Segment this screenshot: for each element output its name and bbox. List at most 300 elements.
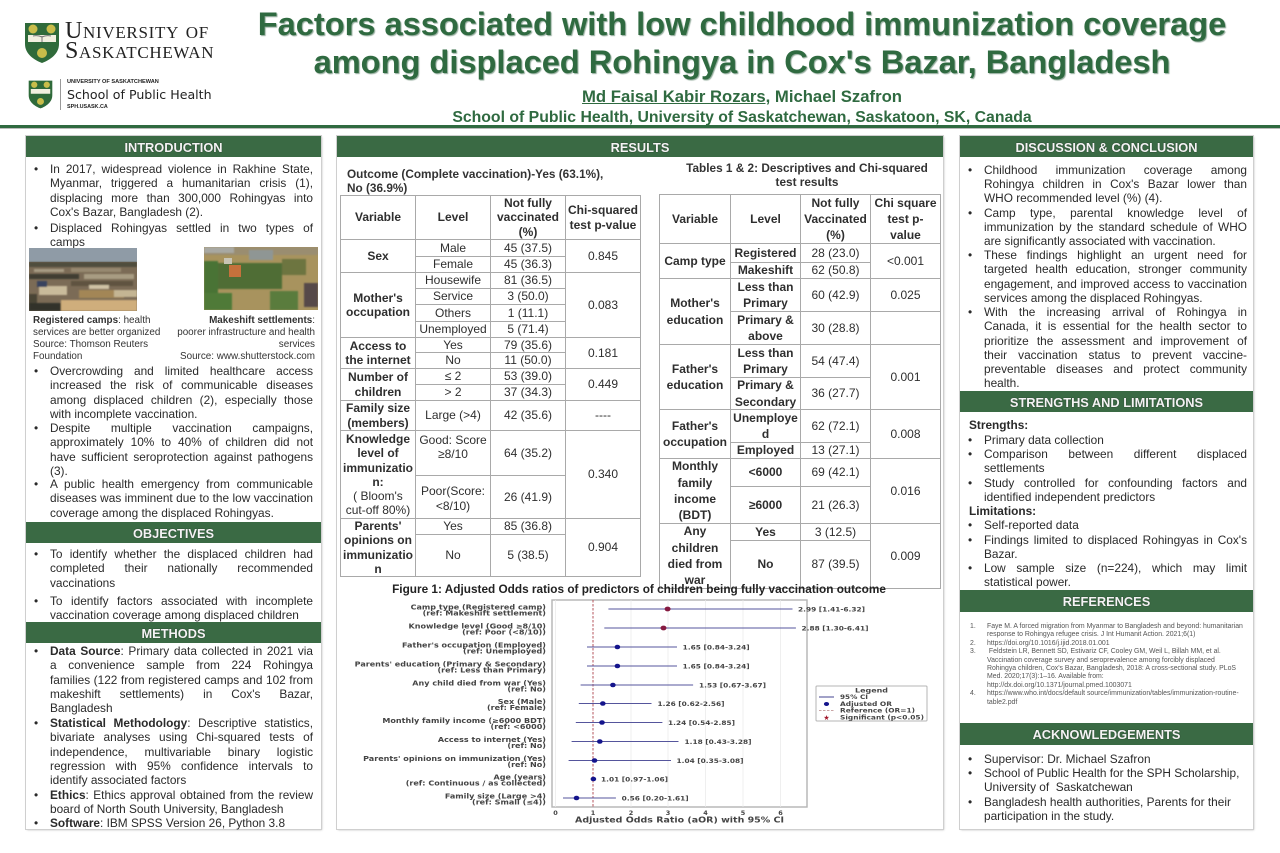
table 1: (%) [519, 225, 537, 239]
heading: results [337, 136, 943, 157]
panel: results [337, 136, 943, 829]
predictor labels: (ref: No) [507, 761, 546, 769]
table 1: 5 (38.5) [507, 548, 549, 562]
odds ratio value labels: 1.53 [0.67-3.67] [699, 682, 766, 690]
table 1: 3 (50.0) [507, 289, 549, 303]
table 1: Level [438, 210, 468, 224]
text: camp type bullet: immunization by the standard schedule of WHO [984, 220, 1247, 234]
text: reference list: Med. 2020;17(3):1–16. Available from: [987, 673, 1104, 680]
panel: right column: • [968, 162, 972, 176]
table 1: <8/10) [436, 498, 470, 512]
odds ratio value labels: 2.99 [1.41-6.32] [798, 606, 865, 614]
text: Canada bullet [968, 305, 1248, 390]
caption: registered camps: services are better organized [33, 327, 160, 338]
text: objective two: To identify factors associated with incomplete [50, 594, 313, 608]
text: overcrowding bullet [34, 364, 313, 421]
caption: registered camps [33, 315, 160, 362]
predictor labels: Father's occupation (Employed) [402, 641, 546, 649]
text: camps bullet: Displaced Rohingyas settled in two types of [50, 221, 313, 235]
text: ethics [34, 788, 314, 816]
heading: objectives [26, 522, 321, 543]
table 1: Yes [443, 338, 463, 352]
text: overcrowding bullet: with incomplete vaccination. [50, 407, 197, 421]
text: camp type bullet: are significantly associated with vaccination. [984, 234, 1216, 248]
table 1: 42 (35.6) [504, 408, 552, 422]
table 1: Chi-squared [568, 203, 638, 217]
table 2: family [678, 476, 712, 490]
table 2: Variable [672, 212, 718, 226]
panel: left column: • [34, 477, 38, 491]
table 1: 0.340 [588, 467, 618, 481]
text: emergency bullet: coverage among the displaced Rohingyas. [50, 506, 274, 520]
predictor labels: Age (years) [493, 773, 546, 781]
text: reference list: https://www.who.int/docs/default source/immunization/tables/immunization-routine- [987, 690, 1239, 697]
authors: Md Faisal Kabir Rozars, Michael Szafron [582, 87, 902, 106]
panel: right column: • [968, 752, 972, 766]
legend: Significant (p<0.05) [840, 714, 924, 721]
caption: makeshift settlements: poorer infrastructure and health [177, 327, 315, 338]
text: strength two: settlements [984, 461, 1045, 475]
table 2: Primary [743, 296, 788, 310]
figure title: Figure 1: Adjusted Odds ratios of predictors of children being fully vaccination outcome [392, 582, 886, 596]
table 1: 81 (36.5) [504, 273, 552, 287]
image: makeshift settlement photo [204, 247, 318, 310]
title: among displaced Rohingya in Cox's Bazar, Bangladesh [314, 43, 1170, 80]
text: Canada bullet: With the increasing arrival of Rohingya in [984, 305, 1247, 319]
table 1: 64 (35.2) [504, 446, 552, 460]
table 2: <0.001 [887, 254, 924, 268]
table 1: n: [372, 475, 384, 489]
table 2: 0.016 [890, 484, 921, 498]
predictor labels: (ref: No) [507, 685, 546, 693]
panel: right column: • [968, 305, 972, 319]
heading: references: REFERENCES [1063, 594, 1150, 609]
text: reference list: 1. [970, 623, 976, 630]
x axis ticks: 2 [629, 809, 633, 817]
predictor labels: (ref: Less than Primary) [437, 666, 546, 674]
table 2: 0.025 [890, 288, 921, 302]
predictor labels: (ref: Makeshift settlement) [423, 609, 546, 617]
text: objective one: vaccinations [50, 576, 115, 590]
table 2: Yes [755, 525, 776, 539]
panel: right column: • [968, 766, 972, 780]
panel: left column: • [34, 547, 38, 561]
text: data source: families (122 from registered camps and 102 from [50, 673, 313, 687]
panel: right column: • [968, 248, 972, 262]
title: Factors associated with low childhood immunization coverage [258, 5, 1226, 42]
table 1: Mother's [353, 291, 403, 305]
table 2: Level [750, 212, 781, 226]
table 1: Knowledge [346, 432, 410, 446]
affiliation: School of Public Health, University of Saskatchewan, Saskatoon, SK, Canada [452, 109, 1032, 126]
table 2: 0.009 [890, 549, 921, 563]
text: data source: Bangladesh [50, 701, 113, 715]
text: reference list: Faye M. A forced migration from Myanmar to Bangladesh and beyond: humanitarian [987, 623, 1243, 630]
table 1: Sex [367, 249, 389, 263]
table 1: Others [435, 306, 471, 320]
forest plot [355, 599, 928, 824]
predictor labels: Sex (Male) [498, 698, 546, 706]
panel: left column: • [34, 421, 38, 435]
text: authorities: participation in the study. [984, 809, 1114, 823]
panel: left column: • [34, 816, 38, 830]
odds ratio value labels: 1.01 [0.97-1.06] [601, 776, 668, 784]
caption: registered camps: Foundation [33, 351, 82, 362]
legend [816, 686, 927, 722]
heading: discussion and conclusion [960, 136, 1253, 157]
text: reference list: http://dx.doi.org/10.1371/journal.pmed.1003071 [987, 682, 1132, 689]
table 1: level of [357, 446, 399, 460]
heading: acknowledgements: ACKNOWLEDGEMENTS [1033, 727, 1180, 742]
legend: 95% CI [840, 694, 868, 701]
table 2: 0.008 [890, 427, 921, 441]
text: limitation two [968, 533, 1247, 561]
table 2: 0.001 [890, 370, 921, 384]
table 2: d [762, 427, 769, 441]
table 2: 13 (27.1) [811, 443, 860, 457]
text: statistical methodology: bivariate analyses using Chi-squared tests of [50, 730, 313, 744]
text: strength three: Study controlled for confounding factors and [984, 476, 1247, 490]
table 2: Secondary [735, 394, 796, 408]
text: objective two [34, 594, 313, 622]
table 2: Employed [737, 443, 794, 457]
text: findings bullet: targeted health education, stronger community [984, 262, 1247, 276]
text: objective two: vaccination coverage among displaced children [50, 608, 299, 622]
table 2: 30 (28.8) [811, 321, 860, 335]
text: limitation two: Findings limited to displaced Rohingyas in Cox's [984, 533, 1247, 547]
panel: left column [26, 136, 321, 829]
heading: introduction [26, 136, 321, 157]
caption: makeshift settlements: Source: www.shutterstock.com [180, 351, 315, 362]
table 1: ≤ 2 [445, 369, 461, 383]
legend: Legend [855, 688, 888, 694]
table 1: ---- [595, 408, 611, 422]
table 1: Large (>4) [425, 408, 481, 422]
table 2: ≥6000 [749, 498, 782, 512]
predictor labels [355, 603, 546, 806]
text: coverage bullet: Rohingya children in Cox's Bazar lower than [984, 177, 1247, 191]
table 2: No [758, 557, 774, 571]
caption: makeshift settlements: Makeshift settlements: [209, 315, 315, 326]
title [258, 5, 1227, 81]
predictor labels: (ref: Female) [487, 704, 546, 712]
table 1: 0.904 [588, 540, 618, 554]
table 2: 54 (47.4) [811, 354, 860, 368]
predictor labels: (ref: Poor (<8/10)) [462, 628, 546, 636]
table 2: died from [668, 557, 722, 571]
panel: left column: • [34, 364, 38, 378]
table 1: Unemployed [419, 322, 487, 336]
table 2: <6000 [749, 465, 782, 479]
text: findings bullet: services among the displaced Rohingyas. [984, 291, 1203, 305]
logo text [67, 79, 212, 110]
text: statistical methodology: identify associated factors [50, 773, 186, 787]
text: coverage bullet: Childhood immunization coverage among [984, 162, 1247, 176]
heading: references [960, 590, 1253, 612]
table 1: Family size [346, 401, 410, 415]
table 1: n [374, 562, 382, 576]
table 1: 45 (36.3) [504, 257, 552, 271]
heading: discussion and conclusion: DISCUSSION & CONCLUSION [1015, 140, 1198, 155]
table 1: Poor(Score: [421, 484, 485, 498]
text: camp type bullet [968, 206, 1248, 248]
table 2: test p- [887, 212, 923, 226]
text: emergency bullet: A public health emergency from communicable [50, 477, 313, 491]
text: objective one [34, 547, 313, 590]
text: limitation one: Self-reported data [984, 518, 1079, 532]
text: campaigns bullet: (3). [50, 464, 68, 478]
text: statistical methodology [34, 716, 314, 787]
table 2: Less than [737, 346, 794, 360]
odds ratio value labels [601, 606, 869, 802]
text: Canada bullet: preventable diseases and protect community [984, 362, 1247, 376]
panel: left column: • [34, 788, 38, 802]
odds ratio value labels: 1.24 [0.54-2.85] [668, 720, 735, 727]
table 2: 62 (50.8) [811, 263, 860, 277]
logo wordmark [65, 18, 214, 64]
x axis ticks: 6 [778, 809, 783, 817]
text: reference list: Vaccination coverage survey and seroprevalence among forcibly displaced [987, 657, 1215, 664]
panel: left column: • [34, 644, 38, 658]
logo wordmark: University of [65, 18, 209, 44]
table 1: ≥8/10 [438, 447, 468, 461]
table 1: test p-value [570, 218, 636, 232]
text: violence bullet: In 2017, widespread violence in Rakhine State, [50, 162, 313, 176]
table 2: Any [684, 524, 706, 538]
text: scholarship: University of Saskatchewan [984, 780, 1133, 794]
odds ratio markers [574, 607, 671, 800]
text: statistical methodology: Statistical Methodology: Descriptive statistics, [50, 716, 313, 730]
text: ethics: Ethics: Ethics approval obtained from the review [50, 788, 313, 802]
x axis ticks: 1 [591, 809, 596, 817]
table 2: value [890, 228, 921, 242]
table 1: opinions on [344, 533, 412, 547]
icon: school shield [28, 80, 52, 108]
text: supervisor: Supervisor: Dr. Michael Szafron [984, 752, 1151, 766]
text: reference list: Feldstein LR, Bennett SD, Estivariz CF, Cooley GM, Weil L, Billah MM, et al. [989, 648, 1221, 655]
text: emergency bullet [34, 477, 313, 520]
logo: University of Saskatchewan [25, 18, 214, 64]
text: strength two: Comparison between different displaced [984, 447, 1247, 461]
text: overcrowding bullet: among displaced children (2), especially those [50, 393, 313, 407]
panel: right column: • [968, 518, 972, 532]
text: reference list: Rohingya children, Cox's Bazar, Bangladesh, 2018: A cross-sectional study. PLoS [987, 665, 1236, 672]
text: violence bullet [34, 162, 313, 219]
table 1: ( Bloom's [353, 489, 403, 503]
plot frame [552, 600, 807, 807]
logo text: SPH.USASK.CA [67, 104, 108, 110]
table 1: 53 (39.0) [504, 369, 552, 383]
text: objective one: completed their nationally recommended [50, 561, 313, 575]
table 2: Primary & [737, 313, 794, 327]
table 1: Variable [355, 210, 401, 224]
table 1: 0.845 [588, 249, 618, 263]
text: camps bullet [34, 221, 314, 249]
table heading: tables 1 and 2 [686, 161, 928, 189]
table 1: Number of [348, 370, 408, 384]
text: violence bullet: displacing more than 300,000 Rohingyas into [50, 191, 313, 205]
predictor labels: Parents' opinions on immunization (Yes) [363, 755, 546, 763]
table 1: cut-off 80%) [346, 503, 410, 517]
table 1: vaccinated [497, 210, 559, 224]
table 2: war [685, 573, 705, 587]
caption: makeshift settlements [177, 315, 315, 362]
text: Canada bullet: their vaccination status to prevent vaccine- [984, 348, 1247, 362]
caption: makeshift settlements: services [279, 339, 315, 350]
heading: introduction: INTRODUCTION [124, 140, 223, 155]
predictor labels: (ref: <6000) [491, 723, 546, 731]
table 1: 79 (35.6) [504, 338, 552, 352]
table 1: Good: Score [419, 433, 487, 447]
panel: right column: • [968, 795, 972, 809]
text: reference list: 2. [970, 640, 976, 647]
table 1: Access to [350, 339, 406, 353]
table 2: (BDT) [679, 508, 711, 522]
table 2: Vaccinated [804, 212, 867, 226]
text: campaigns bullet: Despite multiple vaccination campaigns, [50, 421, 313, 435]
icon: university shield [25, 23, 59, 63]
text: violence bullet: Myanmar, triggered a humanitarian crisis (1), [50, 176, 313, 190]
odds ratio value labels: 1.04 [0.35-3.08] [676, 758, 744, 765]
odds ratio value labels: 2.88 [1.30-6.41] [802, 626, 869, 632]
table 1: 0.449 [588, 377, 618, 391]
table 2: children [672, 541, 718, 555]
text: ethics: board of North South University, Bangladesh [50, 802, 284, 816]
table 2: occupation [663, 435, 727, 449]
table 2: education [667, 378, 723, 392]
table 2: 62 (72.1) [811, 419, 860, 433]
legend: Adjusted OR [840, 701, 892, 708]
table 1: immunizatio [343, 548, 413, 562]
image: registered camp photo [29, 248, 137, 311]
table 1: (members) [347, 416, 409, 430]
panel: left column: • [34, 594, 38, 608]
text: Canada bullet: prioritize the assessment and improvement of [984, 334, 1247, 348]
x axis ticks: 5 [741, 809, 746, 817]
predictor labels: Knowledge level (Good ≥8/10) [408, 622, 546, 630]
heading: strengths and limitations [960, 391, 1253, 412]
table 2: Makeshift [738, 263, 793, 277]
predictor labels: Camp type (Registered camp) [411, 603, 546, 611]
text: strengths list: Primary data collection [984, 433, 1104, 447]
odds ratio value labels: 1.26 [0.62-2.56] [658, 701, 725, 708]
panel: right column: • [968, 476, 972, 490]
text: coverage bullet [968, 162, 1247, 205]
text: statistical methodology: independence, multivariable binary logistic [50, 745, 313, 759]
text: campaigns bullet: have sufficient seroprotection against pathogens [50, 450, 313, 464]
predictor labels: (ref: Continuous / as collected) [406, 779, 546, 787]
table 2: Unemploye [733, 411, 798, 425]
table 1: Service [433, 289, 473, 303]
table 1: 85 (36.8) [504, 519, 552, 533]
text: emergency bullet: diseases was imminent due to the low vaccination [50, 491, 313, 505]
text: strength two [968, 447, 1247, 475]
table 2: Monthly [672, 459, 718, 473]
text: limitations label: Limitations: [969, 504, 1036, 518]
table 2: Father's [672, 419, 718, 433]
table 1: Housewife [425, 273, 481, 287]
table 2: Less than [737, 280, 794, 294]
table 2 [659, 194, 941, 589]
table heading: outcome: No (36.9%) [347, 181, 407, 195]
text: data source: Data Source: Primary data collected in 2021 via [50, 644, 313, 658]
table 1: 11 (50.0) [504, 353, 552, 367]
odds ratio value labels: 0.56 [0.20-1.61] [622, 796, 689, 802]
text: reference list: table2.pdf [987, 699, 1017, 706]
table 1: immunizatio [343, 461, 413, 475]
text: findings bullet: These findings highlight an urgent need for [984, 248, 1247, 262]
panel: right column: • [968, 533, 972, 547]
table 2: Chi square [874, 196, 936, 210]
table 1: 1 (11.1) [508, 306, 548, 320]
predictor labels: Any child died from war (Yes) [412, 679, 546, 687]
text: reference list [960, 623, 1253, 707]
table 2: (%) [826, 228, 845, 242]
table 2: 60 (42.9) [811, 288, 860, 302]
text: reference list: https://doi.org/10.1016/j.ijid.2018.01.001 [987, 640, 1110, 647]
text: overcrowding bullet: Overcrowding and limited healthcare access [50, 364, 313, 378]
text: strengths label: Strengths: [969, 418, 1028, 432]
panel: left column: • [34, 162, 38, 176]
heading: acknowledgements [960, 723, 1253, 745]
x axis ticks: 3 [666, 809, 670, 817]
panel: right column: • [968, 447, 972, 461]
logo: School of Public Health [28, 79, 212, 110]
text: objective one: To identify whether the displaced children had [50, 547, 313, 561]
panel: right column: • [968, 561, 972, 575]
heading: methods [26, 622, 321, 643]
predictor labels: Family size (Large >4) [445, 792, 546, 800]
table heading: tables 1 and 2: Tables 1 & 2: Descriptives and Chi-squared [686, 161, 928, 175]
caption: registered camps: Source: Thomson Reuters [33, 339, 148, 350]
table 1: 45 (37.5) [504, 241, 552, 255]
table 1: No [445, 353, 461, 367]
logo text: UNIVERSITY OF SASKATCHEWAN [67, 79, 159, 85]
odds ratio value labels: 1.65 [0.84-3.24] [683, 664, 750, 670]
table 1: Female [433, 257, 473, 271]
predictor labels: (ref: Unemployed) [463, 647, 546, 655]
text: reference list: response to Rohingya refugee crisis. J Int Humanit Action. 2021;6(1) [987, 631, 1195, 638]
predictor labels: Parents' education (Primary & Secondary) [355, 660, 546, 668]
table heading: outcome [347, 167, 603, 195]
x axis ticks: 0 [553, 809, 558, 817]
panel: right column: • [968, 206, 972, 220]
text: findings bullet: engagement, and improved access to vaccination [984, 277, 1247, 291]
table 1: 37 (34.3) [504, 385, 552, 399]
odds ratio value labels: 1.65 [0.84-3.24] [683, 644, 750, 652]
text: strength three: identified independent predictors [984, 490, 1155, 504]
table 1: children [355, 384, 401, 398]
table 2: Camp type [664, 254, 726, 268]
panel: right column: • [968, 433, 972, 447]
text: limitation three [968, 561, 1247, 589]
table 2: Registered [734, 246, 797, 260]
table 2: Mother's [670, 296, 720, 310]
table 1: 0.083 [588, 298, 618, 312]
text: Canada bullet: Canada, it is essential for the health sector to [984, 319, 1247, 333]
table 1: 0.181 [588, 346, 618, 360]
table 1: Yes [443, 519, 463, 533]
text: campaigns bullet [34, 421, 313, 478]
table 2: Father's [672, 362, 718, 376]
table heading: outcome: Outcome (Complete vaccination)-Yes (63.1%), [347, 167, 603, 181]
text: coverage bullet: WHO recommended level (%) (4). [984, 191, 1162, 205]
text: camp type bullet: Camp type, parental knowledge level of [984, 206, 1247, 220]
table 2: Not fully [811, 196, 859, 210]
text: statistical methodology: regression with 95% confidence intervals to [50, 759, 313, 773]
text: data source: a convenience sample from 224 Rohingya [50, 658, 313, 672]
text: violence bullet: Cox's Bazar, Bangladesh (2). [50, 205, 203, 219]
